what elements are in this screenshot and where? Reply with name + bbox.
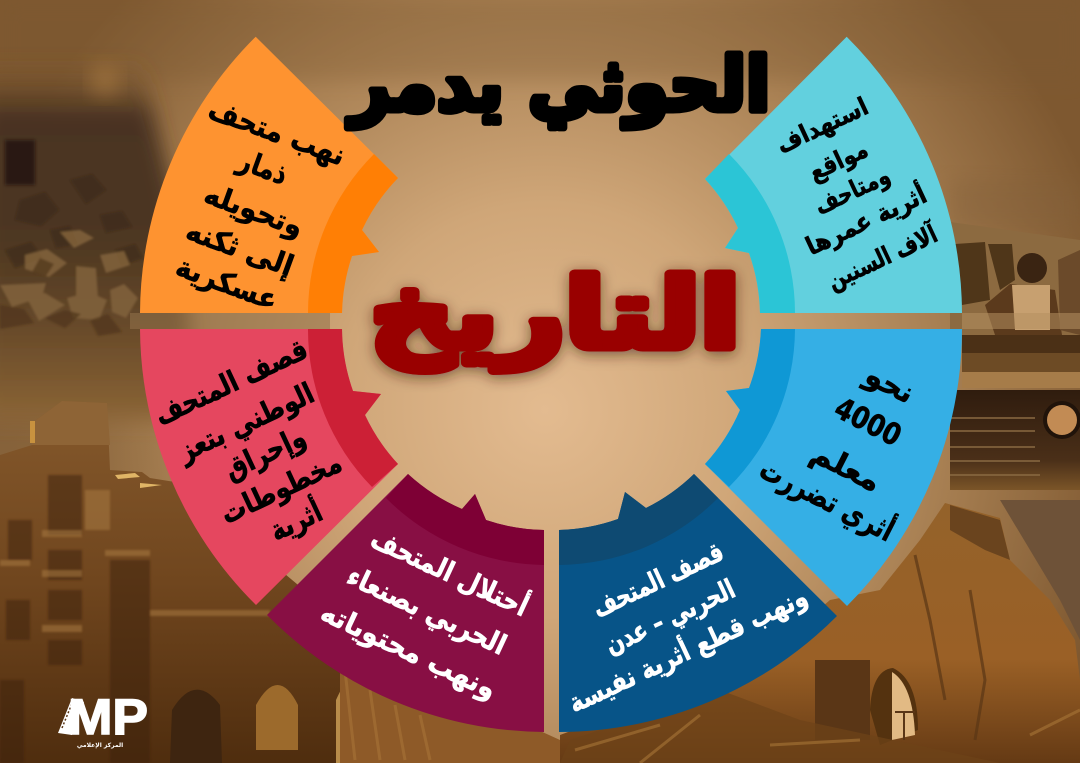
red panel text: أثرية	[263, 492, 328, 548]
cyan panel text: مواقع	[804, 134, 873, 188]
navy panel text: ونهب قطع أثرية نفيسة	[563, 579, 813, 719]
orange panel text: إلى ثكنه	[181, 213, 298, 284]
panel: red, national museum Taiz	[140, 329, 398, 605]
red panel text	[149, 332, 347, 548]
panel: maroon, military museum Sanaa	[267, 474, 544, 732]
panel: blue, 4000 landmarks	[705, 329, 962, 606]
cyan panel text: أثرية عمرها	[800, 178, 932, 262]
logo: MP media: المركز الإعلامي	[77, 742, 123, 749]
blue panel text: نحو	[858, 357, 920, 411]
red panel text: الوطني بتعز	[171, 376, 319, 469]
orange panel text: وتحويله	[200, 176, 308, 244]
maroon panel text: أحتلال المتحف	[366, 520, 535, 623]
title: black heading: الحوثي يدمر	[346, 42, 770, 129]
red panel text: وإحراق	[219, 419, 312, 487]
lower left ruined building	[0, 401, 560, 763]
red panel text: مخطوطات	[215, 445, 347, 531]
cyan panel text	[772, 92, 943, 296]
blue panel text	[754, 357, 920, 549]
cyan panel text: استهداف	[772, 92, 873, 160]
orange panel text: عسكرية	[171, 249, 283, 317]
panel: orange, museum of Dhamar	[140, 37, 398, 317]
panel: cyan, targeting sites	[705, 37, 962, 313]
cyan panel text: ومتاحف	[810, 160, 895, 221]
blue panel text: معلم	[805, 435, 887, 500]
upper left rubble wall and rocks	[0, 60, 330, 420]
maroon panel text: ونهب محتوياته	[316, 595, 502, 706]
red panel text: قصف المتحف	[149, 332, 313, 432]
lower right ruined building	[560, 500, 1080, 763]
maroon panel text: الحربي بصنعاء	[342, 559, 512, 662]
navy panel text: قصف المتحف	[588, 537, 729, 624]
title: red keyword: التاريخ	[370, 258, 740, 370]
cyan panel text: آلاف السنين	[822, 218, 943, 296]
navy panel text: الحربي – عدن	[600, 574, 740, 661]
orange panel text: نهب متحف	[204, 92, 350, 172]
blue panel text: 4000	[829, 391, 907, 454]
maroon panel text	[316, 520, 535, 706]
orange panel text: ذمار	[232, 142, 292, 192]
orange panel text	[171, 92, 350, 317]
blue panel text: أثري تضررت	[754, 449, 901, 549]
panel: navy, military museum Aden	[559, 474, 837, 732]
logo: MP media: MP	[68, 689, 148, 745]
truck and people on right edge	[950, 180, 1080, 490]
